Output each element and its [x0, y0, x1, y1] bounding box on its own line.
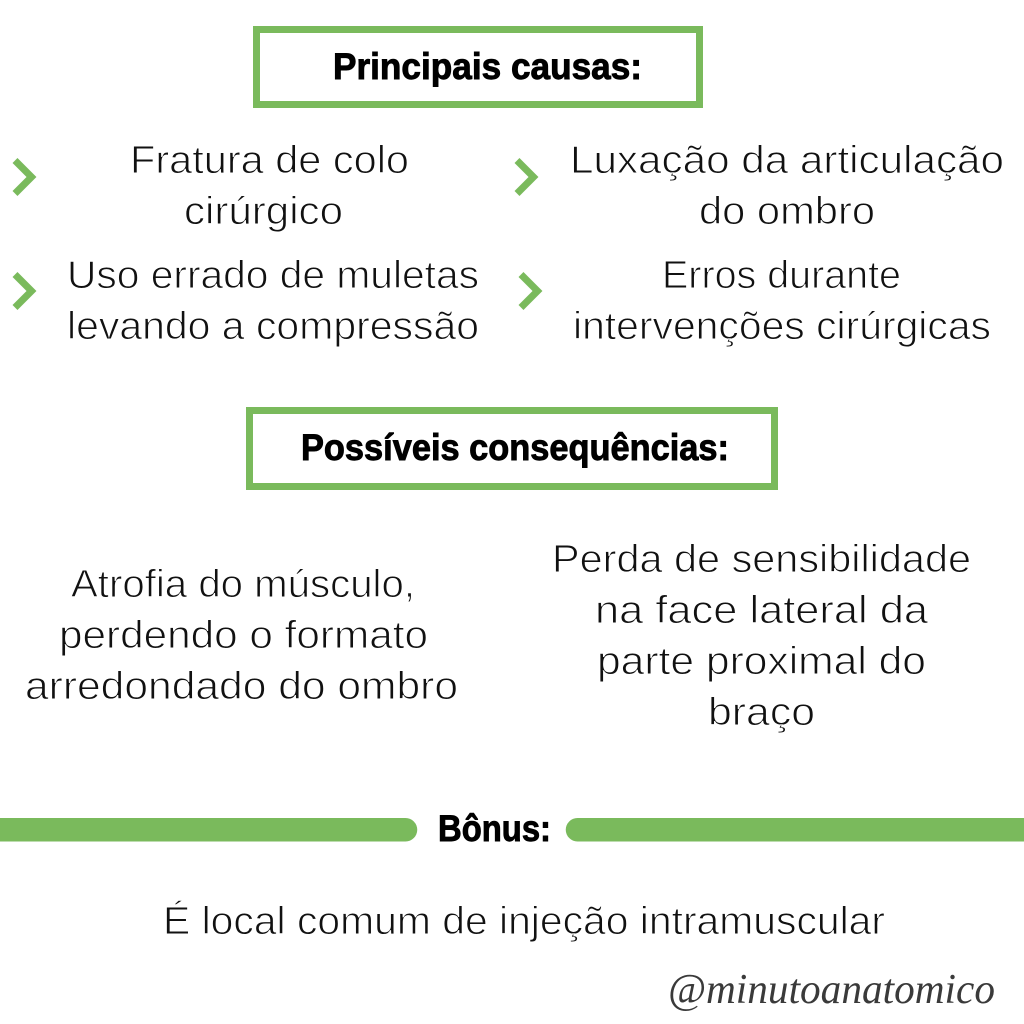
text: cause 2 [570, 139, 1004, 233]
text: consequence 1: perdendo o formato [59, 614, 428, 657]
icon: chevron cause 3 [15, 274, 32, 308]
text: cause 3: levando a compressão [67, 305, 479, 348]
text: cause 1: cirúrgico [184, 190, 343, 233]
text: cause 3: Uso errado de muletas [67, 254, 479, 297]
text: consequence 2 [552, 538, 971, 734]
text: consequence 1 [25, 563, 458, 708]
text: cause 2: Luxação da articulação [570, 139, 1004, 182]
panel: possíveis consequências heading: Possíveis consequências: [301, 427, 729, 468]
icon: chevron cause 2 [517, 160, 534, 194]
text: consequence 2: braço [708, 691, 815, 734]
text: cause 3 [67, 254, 479, 348]
panel: principais causas heading: Principais causas: [333, 46, 642, 87]
panel: bônus divider [0, 808, 1024, 849]
text: consequence 1: Atrofia do músculo, [71, 563, 415, 606]
signature: handle: @minutoanatomico [668, 967, 995, 1013]
text: bonus statement: É local comum de injeção intramuscular [163, 900, 885, 943]
text: consequence 2: na face lateral da [595, 589, 928, 632]
icon: chevron cause 1 [15, 160, 32, 194]
text: cause 1: Fratura de colo [130, 139, 409, 182]
panel: principais causas heading [256, 30, 700, 104]
text: cause 4: Erros durante [662, 254, 901, 297]
text: consequence 2: Perda de sensibilidade [552, 538, 971, 581]
left bar [0, 818, 417, 842]
icon: chevron cause 4 [521, 274, 538, 308]
panel: possíveis consequências heading [250, 410, 774, 486]
panel: causes list [15, 139, 1004, 348]
text: consequence 2: parte proximal do [597, 640, 926, 683]
text: cause 4 [573, 254, 991, 348]
text: cause 1 [130, 139, 409, 233]
text: cause 2: do ombro [699, 190, 875, 233]
text: consequence 1: arredondado do ombro [25, 665, 458, 708]
right bar [566, 818, 1024, 842]
heading: bônus: Bônus: [438, 808, 551, 849]
text: cause 4: intervenções cirúrgicas [573, 305, 991, 348]
